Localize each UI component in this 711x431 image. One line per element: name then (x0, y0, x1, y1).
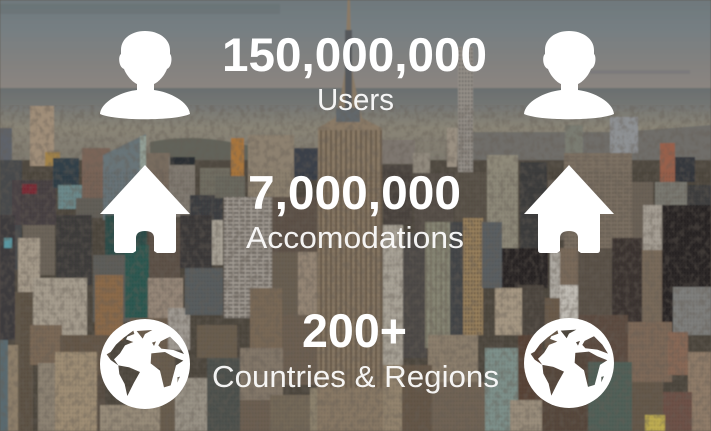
stat label: regions: Countries & Regions (212, 359, 499, 394)
stat label: accommodations: Accomodations (246, 220, 464, 255)
icon: house left (100, 165, 190, 253)
stat number: users: 150,000,000 (222, 28, 487, 81)
stat number: regions: 200+ (302, 304, 407, 357)
icon: house right (524, 165, 614, 253)
icon: person right (524, 31, 614, 119)
icon: person left (100, 31, 190, 119)
icon: globe left (100, 319, 190, 409)
right half buildings (378, 140, 415, 164)
stat label: users: Users (317, 82, 394, 117)
Empire State Building (317, 0, 383, 431)
stat number: accommodations: 7,000,000 (248, 166, 461, 219)
icon: globe right (524, 318, 614, 408)
